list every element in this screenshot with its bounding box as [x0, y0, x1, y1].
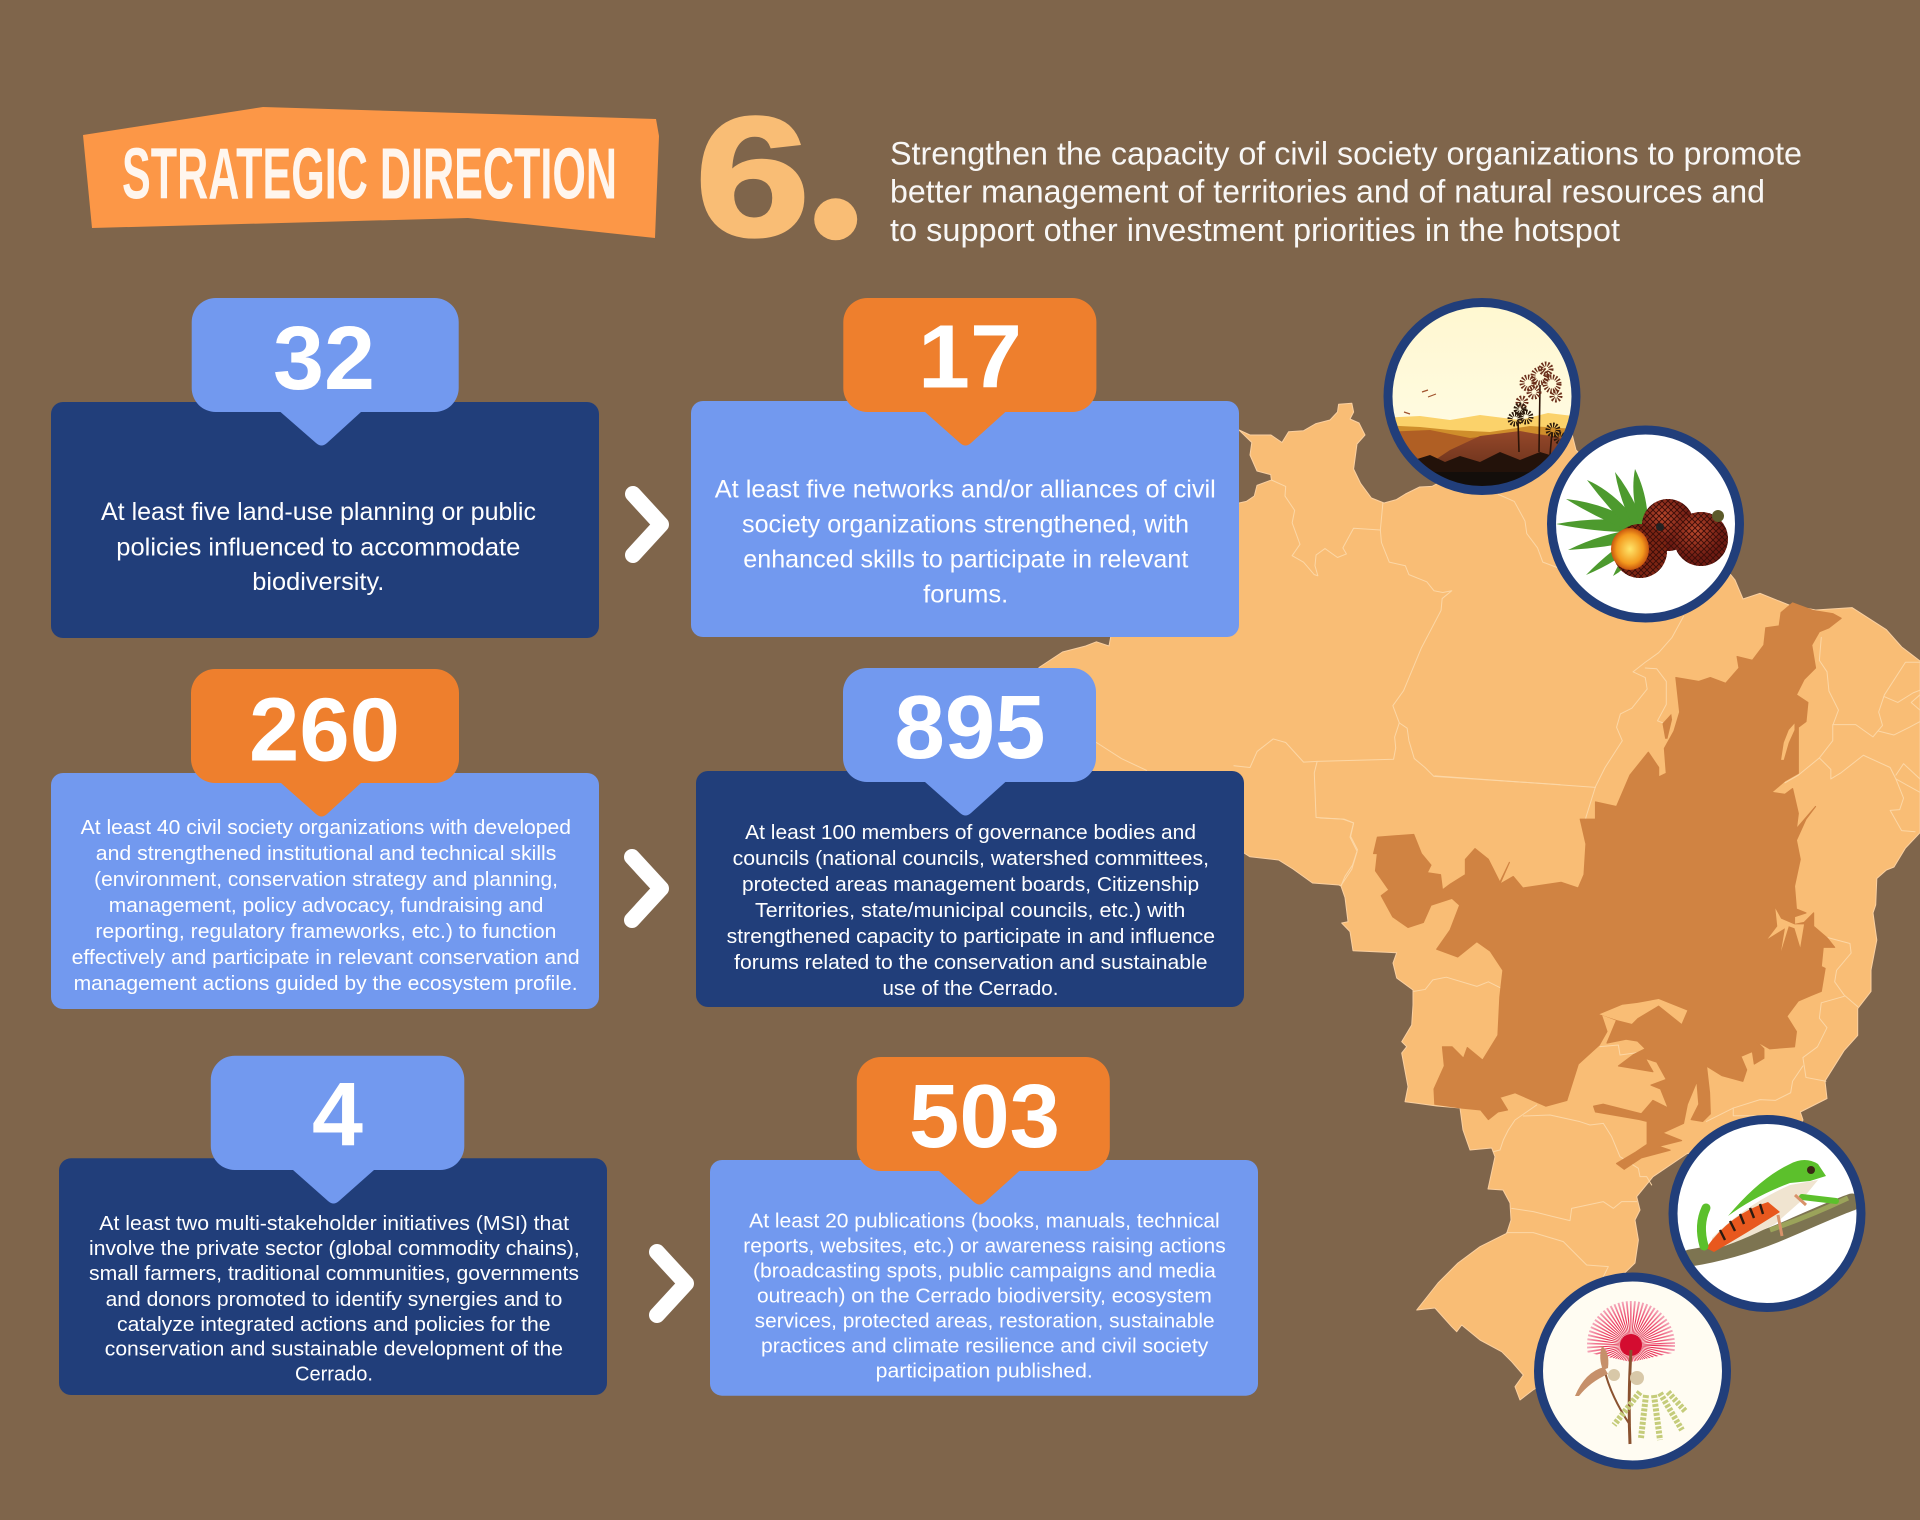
description [727, 821, 1215, 1000]
strategic direction description: to support other investment priorities in the hotspot [890, 212, 1620, 248]
description: reporting, regulatory frameworks, etc.) to function [95, 920, 556, 943]
icon: savanna landscape medallion [1380, 295, 1590, 500]
number: 4 [312, 1065, 363, 1165]
description [715, 475, 1216, 608]
icon: buriti palm fruit medallion [1552, 430, 1740, 618]
number bubble [191, 669, 459, 816]
description: enhanced skills to participate in relevant [743, 546, 1188, 574]
description: use of the Cerrado. [882, 977, 1058, 1000]
panel: 503 publications [710, 1057, 1258, 1396]
description: forums. [923, 580, 1008, 608]
number bubble [857, 1057, 1110, 1204]
description: conservation and sustainable development of the [105, 1338, 563, 1361]
map: central and north-eastern state borders [1320, 616, 1920, 1121]
description: At least five land-use planning or public [101, 498, 536, 526]
description: At least 100 members of governance bodies and [745, 821, 1196, 844]
panel: 17 networks and alliances [691, 298, 1239, 637]
description: At least 40 civil society organizations with developed [81, 816, 571, 839]
number: 895 [894, 678, 1046, 778]
description: forums related to the conservation and sustainable [734, 951, 1208, 974]
description: practices and climate resilience and civil society [761, 1335, 1209, 1358]
numeral 6: 6 [695, 82, 810, 272]
description: (environment, conservation strategy and planning, [94, 868, 558, 891]
description: effectively and participate in relevant conservation and [72, 946, 580, 969]
number: 17 [918, 307, 1022, 407]
card body [696, 771, 1244, 1007]
description: small farmers, traditional communities, governments [89, 1262, 579, 1285]
description: (broadcasting spots, public campaigns and media [753, 1260, 1216, 1283]
strategic direction description [890, 135, 1802, 248]
map: southern state borders [1493, 1045, 1652, 1277]
description [743, 1210, 1226, 1383]
number bubble [843, 298, 1096, 446]
card body [710, 1160, 1258, 1396]
description: biodiversity. [252, 568, 384, 596]
description: involve the private sector (global commodity chains), [89, 1237, 580, 1260]
strategic direction description: Strengthen the capacity of civil society organizations to promote [890, 135, 1802, 171]
description [101, 498, 536, 596]
map: Cerrado biome region [1374, 603, 1841, 1169]
description: outreach) on the Cerrado biodiversity, ecosystem [757, 1285, 1212, 1308]
description: protected areas management boards, Citizenship [742, 873, 1199, 896]
description: Territories, state/municipal councils, etc.) with [755, 899, 1185, 922]
description: policies influenced to accommodate [116, 534, 520, 562]
description: At least five networks and/or alliances of civil [715, 475, 1216, 503]
round full stop [814, 198, 857, 240]
description: management actions guided by the ecosystem profile. [74, 972, 578, 995]
description: councils (national councils, watershed committees, [733, 847, 1209, 870]
number: 32 [273, 309, 375, 409]
number: 260 [249, 680, 400, 780]
number: 503 [909, 1067, 1060, 1167]
description: catalyze integrated actions and policies for the [117, 1313, 550, 1336]
panel: 32 land-use policies [51, 298, 599, 638]
arrow: first row [633, 494, 661, 555]
map: northern state borders [1096, 480, 1560, 885]
description: management, policy advocacy, fundraising and [109, 894, 543, 917]
map of Brazil with Cerrado hotspot [1000, 403, 1920, 1400]
description: services, protected areas, restoration, sustainable [755, 1310, 1215, 1333]
banner title: STRATEGIC DIRECTION [122, 134, 617, 214]
card body [51, 773, 599, 1009]
panel: 4 multi-stakeholder initiatives [59, 1056, 607, 1395]
strategic direction description: better management of territories and of natural resources and [890, 174, 1765, 210]
description: At least two multi-stakeholder initiatives (MSI) that [99, 1212, 569, 1235]
number bubble [211, 1056, 464, 1204]
description [72, 816, 580, 995]
description: Cerrado. [295, 1363, 373, 1386]
description [89, 1212, 580, 1386]
description: At least 20 publications (books, manuals, technical [749, 1210, 1220, 1233]
description: and strengthened institutional and technical skills [96, 842, 556, 865]
description: society organizations strengthened, with [742, 511, 1189, 539]
banner shape [83, 107, 659, 238]
panel: 895 governance body members [696, 668, 1244, 1007]
arrow: third row [657, 1252, 686, 1315]
icon: tree frog medallion [1673, 1120, 1861, 1308]
description: participation published. [876, 1360, 1093, 1383]
description: strengthened capacity to participate in and influence [727, 925, 1215, 948]
number bubble [192, 298, 459, 446]
map: Brazil states base [1000, 403, 1920, 1400]
card body [59, 1158, 607, 1395]
description: reports, websites, etc.) or awareness raising actions [743, 1235, 1226, 1258]
panel: 260 civil society organizations [51, 669, 599, 1009]
arrow: second row [632, 857, 661, 920]
description: and donors promoted to identify synergies and to [106, 1288, 562, 1311]
card body [51, 402, 599, 638]
strategic direction banner [83, 107, 659, 238]
number six heading [695, 82, 857, 272]
icon: calliandra flower medallion [1538, 1277, 1726, 1465]
card body [691, 401, 1239, 637]
number bubble [843, 668, 1096, 816]
